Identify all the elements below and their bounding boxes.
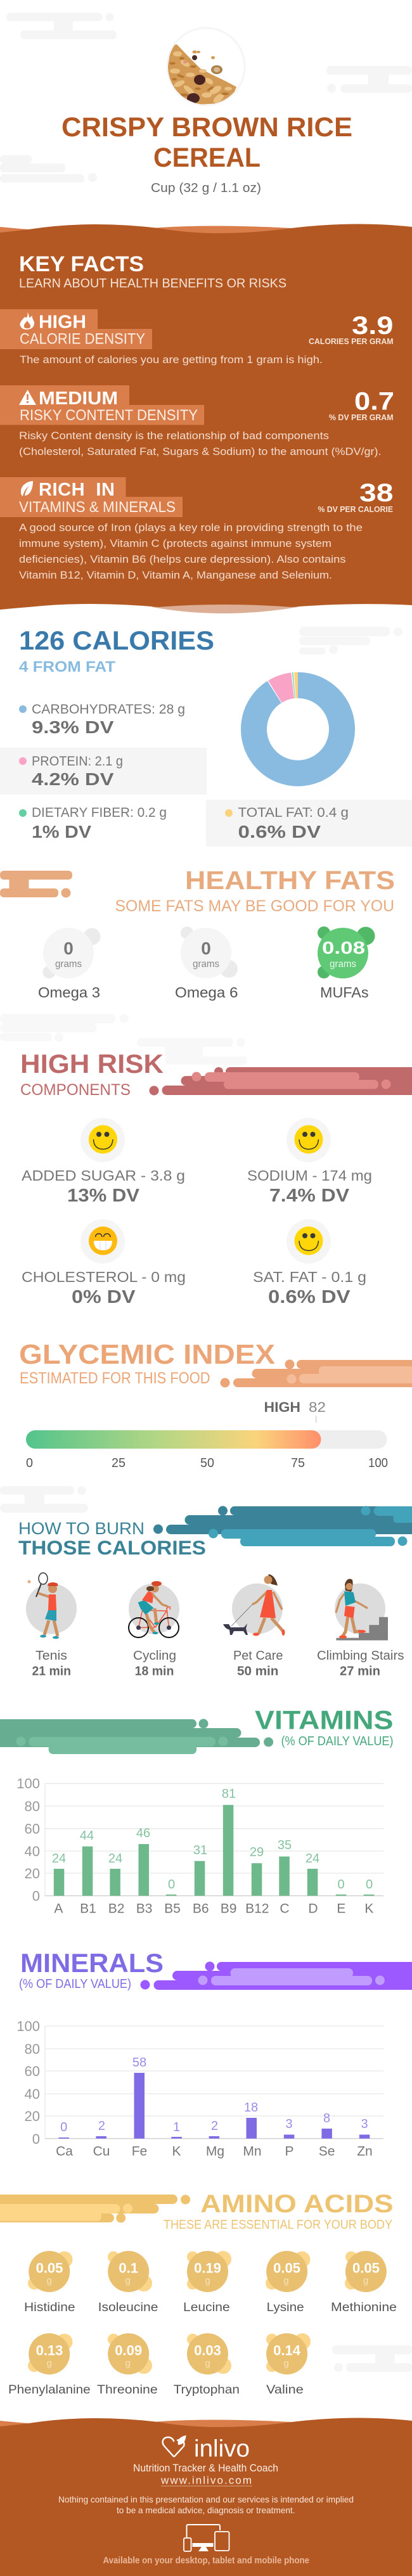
amino: leucine: Leucine: [183, 2301, 230, 2314]
fact: rich in vitamins and minerals: immune system), Vitamin C (protects against immune system: [19, 538, 332, 549]
title: [61, 112, 352, 173]
bar chart: vitamins: B6: [193, 1902, 209, 1916]
omega 3: Omega 3: [38, 984, 100, 1001]
panel: minerals: [16, 1948, 412, 2159]
legend: carbohydrates: 9.3% DV: [32, 717, 114, 737]
cholesterol: CHOLESTEROL - 0 mg: [22, 1269, 186, 1285]
bar chart: vitamins: K: [364, 1902, 373, 1916]
bar chart: vitamins: 0: [32, 1888, 40, 1904]
bar chart: minerals: 20: [25, 2108, 40, 2124]
amino: lysine: 0.05: [273, 2260, 300, 2276]
bar chart: minerals: 60: [25, 2063, 40, 2079]
activity labels: 27 min: [340, 1664, 380, 1678]
header section: [0, 13, 412, 195]
bar chart: minerals: P: [285, 2144, 294, 2159]
bar chart: vitamins: [16, 1776, 383, 1916]
heading: amino acids: AMINO ACIDS: [200, 2190, 393, 2218]
heading: vitamins: (% OF DAILY VALUE): [281, 1734, 393, 1748]
disclaimer: to be a medical advice, diagnosis or treatment.: [117, 2505, 295, 2515]
banner: high risk: [150, 1067, 412, 1095]
amino: methionine: g: [363, 2275, 368, 2286]
amino: isoleucine: g: [126, 2275, 131, 2286]
bar chart: minerals: [16, 2018, 383, 2159]
gauge axis: 25: [112, 1456, 126, 1470]
activity labels: 50 min: [237, 1664, 278, 1678]
bar chart: minerals: 3: [361, 2117, 368, 2131]
bar chart: vitamins: B1: [80, 1902, 96, 1916]
amino: valine: Valine: [266, 2383, 304, 2397]
fact: calorie density: 3.9: [352, 312, 393, 340]
added sugar: [22, 1118, 185, 1206]
donut chart: [254, 685, 342, 773]
amino: methionine: Methionine: [331, 2301, 397, 2314]
cholesterol: 0% DV: [72, 1287, 136, 1307]
bar chart: minerals: Cu: [93, 2144, 110, 2159]
panel: glycemic index: [19, 1339, 412, 1470]
amino: threonine: 0.09: [115, 2343, 142, 2359]
amino: leucine: [183, 2251, 231, 2314]
amino: isoleucine: 0.1: [119, 2260, 138, 2276]
legend: total fat: TOTAL FAT: 0.4 g: [238, 805, 349, 820]
banner: vitamins: [0, 1719, 273, 1754]
panel: calories: [0, 625, 412, 847]
bar chart: minerals: 100: [16, 2018, 40, 2034]
panel: vitamins: [0, 1705, 393, 1916]
bar chart: vitamins: A: [54, 1902, 63, 1916]
bar chart: vitamins: 31: [193, 1843, 207, 1857]
omega 6: Omega 6: [175, 984, 238, 1001]
panel: high risk: [0, 1014, 412, 1307]
added sugar: ADDED SUGAR - 3.8 g: [22, 1167, 185, 1184]
sodium: [247, 1118, 372, 1206]
heading: high risk: [20, 1049, 164, 1099]
sodium: 7.4% DV: [269, 1186, 350, 1206]
heading: burn: HOW TO BURN: [18, 1519, 145, 1538]
bar chart: minerals: 3: [285, 2117, 293, 2131]
icon: smile face: [294, 1125, 323, 1153]
saturated fat: 0.6% DV: [268, 1287, 351, 1307]
amino: threonine: Threonine: [97, 2383, 158, 2397]
fact: calorie density: HIGH: [39, 312, 86, 332]
bar chart: minerals: Zn: [357, 2144, 373, 2159]
heading: vitamins: VITAMINS: [255, 1705, 393, 1735]
cholesterol: [22, 1219, 186, 1307]
bar chart: minerals: Mn: [243, 2144, 262, 2159]
title: CRISPY BROWN RICE: [61, 112, 352, 143]
activity: pet care: [223, 1574, 285, 1636]
bar chart: vitamins: 80: [25, 1798, 40, 1814]
amino: leucine: 0.19: [194, 2260, 221, 2276]
activity: cycling: [129, 1581, 179, 1637]
bar chart: vitamins: 44: [80, 1829, 94, 1843]
gauge axis: [26, 1456, 388, 1470]
bar chart: minerals: Fe: [132, 2144, 147, 2159]
amino: histidine: Histidine: [24, 2301, 75, 2314]
logo: inlivo: [163, 2435, 250, 2463]
gauge bar: [26, 1430, 387, 1449]
fact: calorie density: [0, 309, 393, 366]
panel: how to burn calories: [0, 1486, 412, 1678]
activity: tennis: [26, 1573, 77, 1639]
activity labels: [32, 1649, 404, 1678]
bar chart: vitamins: C: [280, 1902, 290, 1916]
activity labels: Tenis: [35, 1649, 67, 1663]
amino: valine: g: [283, 2358, 289, 2369]
bar chart: minerals: 2: [98, 2119, 105, 2133]
legend: protein: [19, 754, 123, 789]
heading: amino acids: [164, 2190, 393, 2232]
banner: burn: [153, 1506, 412, 1546]
gauge axis: 50: [200, 1456, 214, 1470]
fact: rich in vitamins and minerals: A good source of Iron (plays a key role in providing strength to the: [19, 522, 363, 534]
bar chart: minerals: 0: [32, 2131, 40, 2147]
amino: histidine: 0.05: [36, 2260, 63, 2276]
legend: carbohydrates: CARBOHYDRATES: 28 g: [32, 702, 185, 717]
gauge value: HIGH: [264, 1399, 300, 1415]
legend: dietary fiber: DIETARY FIBER: 0.2 g: [32, 805, 167, 820]
gauge axis: 100: [368, 1456, 388, 1470]
bar chart: vitamins: 81: [222, 1787, 236, 1801]
disclaimer: [58, 2494, 354, 2515]
icon: smile face: [89, 1125, 117, 1153]
banner: amino acids: [0, 2195, 190, 2223]
amino: tryptophan: g: [205, 2358, 210, 2369]
gauge value: 82: [309, 1399, 326, 1415]
bar chart: minerals: 1: [173, 2120, 180, 2134]
amino: isoleucine: [98, 2251, 158, 2314]
gauge value: [264, 1399, 326, 1423]
legend: protein: 4.2% DV: [32, 769, 114, 789]
panel: amino acids: [0, 2190, 412, 2397]
banner: minerals: [141, 1962, 412, 1990]
added sugar: 13% DV: [67, 1186, 140, 1206]
heading: healthy fats: SOME FATS MAY BE GOOD FOR YOU: [115, 897, 394, 915]
amino: tryptophan: 0.03: [194, 2343, 221, 2359]
bar chart: minerals: 0: [60, 2120, 67, 2134]
amino: threonine: [97, 2333, 158, 2397]
bar chart: vitamins: 46: [136, 1826, 150, 1840]
panel: key facts: [0, 224, 412, 613]
amino: lysine: g: [283, 2275, 289, 2286]
heading: glycemic index: ESTIMATED FOR THIS FOOD: [20, 1369, 210, 1387]
amino: phenylalanine: 0.13: [36, 2343, 63, 2359]
amino: lysine: Lysine: [267, 2301, 304, 2314]
heading: minerals: [19, 1948, 164, 1991]
amino: methionine: 0.05: [352, 2260, 380, 2276]
legend: protein: PROTEIN: 2.1 g: [32, 754, 123, 769]
heading: burn: [18, 1519, 206, 1559]
bar chart: vitamins: 0: [337, 1878, 345, 1892]
bar chart: minerals: 8: [323, 2111, 330, 2125]
bar chart: minerals: Se: [319, 2144, 335, 2159]
fact: rich in vitamins and minerals: % DV PER CALORIE: [318, 505, 393, 514]
amino: methionine: [331, 2251, 397, 2314]
fact: calorie density: The amount of calories you are getting from 1 gram is high.: [20, 354, 323, 366]
icon: leaf: [21, 481, 33, 496]
bar chart: minerals: Ca: [56, 2144, 73, 2159]
heading: high risk: COMPONENTS: [20, 1081, 131, 1099]
icon: warning: [19, 390, 36, 405]
food image: [167, 28, 245, 105]
mufas: 0.08: [322, 938, 365, 958]
bar chart: vitamins: B2: [108, 1902, 124, 1916]
tagline: www.inlivo.com: [160, 2474, 252, 2487]
bar chart: minerals: 58: [132, 2056, 146, 2070]
heading: amino acids: THESE ARE ESSENTIAL FOR YOUR BODY: [164, 2218, 392, 2232]
panel: footer: [0, 2418, 412, 2576]
activity labels: Climbing Stairs: [317, 1649, 404, 1663]
omega 3: [38, 928, 100, 1001]
icon: grin face: [89, 1227, 117, 1255]
bar chart: vitamins: 0: [168, 1878, 175, 1892]
bar chart: vitamins: B9: [221, 1902, 236, 1916]
bar chart: vitamins: D: [308, 1902, 318, 1916]
bar chart: vitamins: 0: [366, 1878, 373, 1892]
legend: dietary fiber: [19, 805, 167, 842]
heading: healthy fats: HEALTHY FATS: [185, 866, 395, 895]
omega 3: 0: [63, 939, 74, 958]
bar chart: vitamins: 100: [16, 1776, 40, 1791]
bar chart: minerals: 80: [25, 2041, 40, 2057]
banner: glycemic index: [221, 1360, 412, 1388]
saturated fat: SAT. FAT - 0.1 g: [253, 1269, 366, 1285]
bar chart: minerals: Mg: [206, 2144, 224, 2159]
bar chart: vitamins: 40: [25, 1843, 40, 1859]
gauge axis: 75: [291, 1456, 305, 1470]
icon: flame: [20, 312, 34, 330]
bar chart: vitamins: 29: [250, 1845, 264, 1859]
fact: risky content density: 0.7: [354, 388, 394, 416]
fact: risky content density: [0, 385, 394, 458]
amino: histidine: g: [47, 2275, 52, 2286]
fact: rich in vitamins and minerals: [0, 477, 393, 581]
amino: histidine: [24, 2251, 75, 2314]
fact: risky content density: % DV PER GRAM: [329, 413, 393, 422]
bar chart: vitamins: 20: [25, 1866, 40, 1881]
activity labels: Cycling: [133, 1649, 176, 1663]
mufas: [318, 926, 375, 1001]
bar chart: vitamins: B12: [245, 1902, 269, 1916]
bar chart: minerals: 18: [244, 2101, 258, 2115]
fact: rich in vitamins and minerals: Vitamin B12, Vitamin D, Vitamin A, Manganese and Selenium.: [19, 570, 332, 581]
tagline: Nutrition Tracker & Health Coach: [133, 2463, 278, 2474]
heading: glycemic index: GLYCEMIC INDEX: [19, 1339, 275, 1370]
heading: key facts: [19, 252, 286, 290]
gauge axis: 0: [26, 1456, 33, 1470]
amino: phenylalanine: [8, 2333, 91, 2397]
tagline: [133, 2463, 278, 2487]
bar chart: vitamins: B5: [164, 1902, 181, 1916]
bar chart: minerals: 40: [25, 2086, 40, 2102]
heading: minerals: (% OF DAILY VALUE): [19, 1977, 131, 1991]
fact: risky content density: Risky Content density is the relationship of bad components: [19, 430, 329, 442]
fact: calorie density: CALORIE DENSITY: [20, 331, 145, 347]
heading: healthy fats: [115, 866, 395, 915]
fact: risky content density: MEDIUM: [39, 388, 118, 409]
heading: burn: THOSE CALORIES: [18, 1536, 206, 1559]
availability note: Available on your desktop, tablet and mobile phone: [103, 2556, 309, 2566]
heading: high risk: HIGH RISK: [20, 1049, 164, 1079]
mufas: grams: [330, 959, 356, 970]
heading: calories: 126 CALORIES: [19, 625, 214, 655]
panel: healthy fats: [0, 866, 395, 1001]
bar chart: minerals: 2: [211, 2119, 218, 2133]
heading: glycemic index: [19, 1339, 275, 1387]
activity: climbing stairs: [335, 1579, 388, 1640]
fact: rich in vitamins and minerals: 38: [359, 479, 393, 507]
heading: vitamins: [255, 1705, 393, 1748]
amino: threonine: g: [126, 2358, 131, 2369]
amino: phenylalanine: Phenylalanine: [8, 2383, 91, 2397]
amino: valine: 0.14: [273, 2343, 301, 2359]
heading: minerals: MINERALS: [20, 1948, 164, 1978]
fact: rich in vitamins and minerals: RICH IN: [39, 480, 115, 500]
amino: tryptophan: Tryptophan: [174, 2383, 240, 2397]
amino: lysine: [266, 2251, 310, 2314]
activity labels: 21 min: [32, 1664, 71, 1678]
bar chart: vitamins: 35: [278, 1838, 292, 1852]
heading: calories: 4 FROM FAT: [19, 658, 115, 676]
sodium: SODIUM - 174 mg: [247, 1167, 372, 1184]
legend: total fat: [225, 805, 349, 842]
saturated fat: [253, 1219, 366, 1307]
bar chart: vitamins: E: [337, 1902, 345, 1916]
bar chart: vitamins: 60: [25, 1821, 40, 1836]
activity labels: 18 min: [135, 1664, 174, 1678]
bar chart: vitamins: 24: [108, 1852, 122, 1866]
omega 6: [175, 926, 238, 1001]
amino: tryptophan: [174, 2333, 240, 2397]
heading: calories: [19, 625, 214, 676]
fact: rich in vitamins and minerals: VITAMINS & MINERALS: [19, 499, 176, 516]
fact: calorie density: CALORIES PER GRAM: [309, 337, 393, 346]
bar chart: minerals: K: [172, 2144, 181, 2159]
mufas: MUFAs: [320, 984, 369, 1001]
heading: key facts: LEARN ABOUT HEALTH BENEFITS OR RISKS: [19, 276, 286, 290]
omega 6: 0: [201, 939, 211, 958]
bar chart: vitamins: B3: [136, 1902, 152, 1916]
omega 3: grams: [55, 959, 82, 970]
icon: smile face: [294, 1227, 323, 1255]
logo: inlivo: inlivo: [194, 2436, 250, 2463]
bar chart: vitamins: 24: [306, 1852, 319, 1866]
omega 6: grams: [193, 959, 219, 970]
serving size: Cup (32 g / 1.1 oz): [151, 181, 261, 195]
amino: phenylalanine: g: [47, 2358, 52, 2369]
fact: risky content density: RISKY CONTENT DENSITY: [20, 407, 198, 424]
fact: rich in vitamins and minerals: deficiencies), Vitamin B6 (helps cure depression). Also contains: [19, 554, 346, 565]
disclaimer: Nothing contained in this presentation and our services is intended or implied: [58, 2494, 354, 2504]
legend: carbohydrates: [19, 702, 185, 737]
legend: dietary fiber: 1% DV: [32, 822, 91, 842]
amino: isoleucine: Isoleucine: [98, 2301, 158, 2314]
amino: valine: [266, 2333, 311, 2397]
activity labels: Pet Care: [233, 1649, 283, 1663]
legend: total fat: 0.6% DV: [238, 822, 321, 842]
title: CEREAL: [153, 143, 261, 173]
fact: risky content density: (Cholesterol, Saturated Fat, Sugars & Sodium) to the amount (%DV/gr).: [19, 446, 382, 458]
icon: devices: [184, 2525, 229, 2551]
bar chart: vitamins: 24: [52, 1852, 66, 1866]
heading: key facts: KEY FACTS: [19, 252, 144, 276]
amino: leucine: g: [205, 2275, 210, 2286]
